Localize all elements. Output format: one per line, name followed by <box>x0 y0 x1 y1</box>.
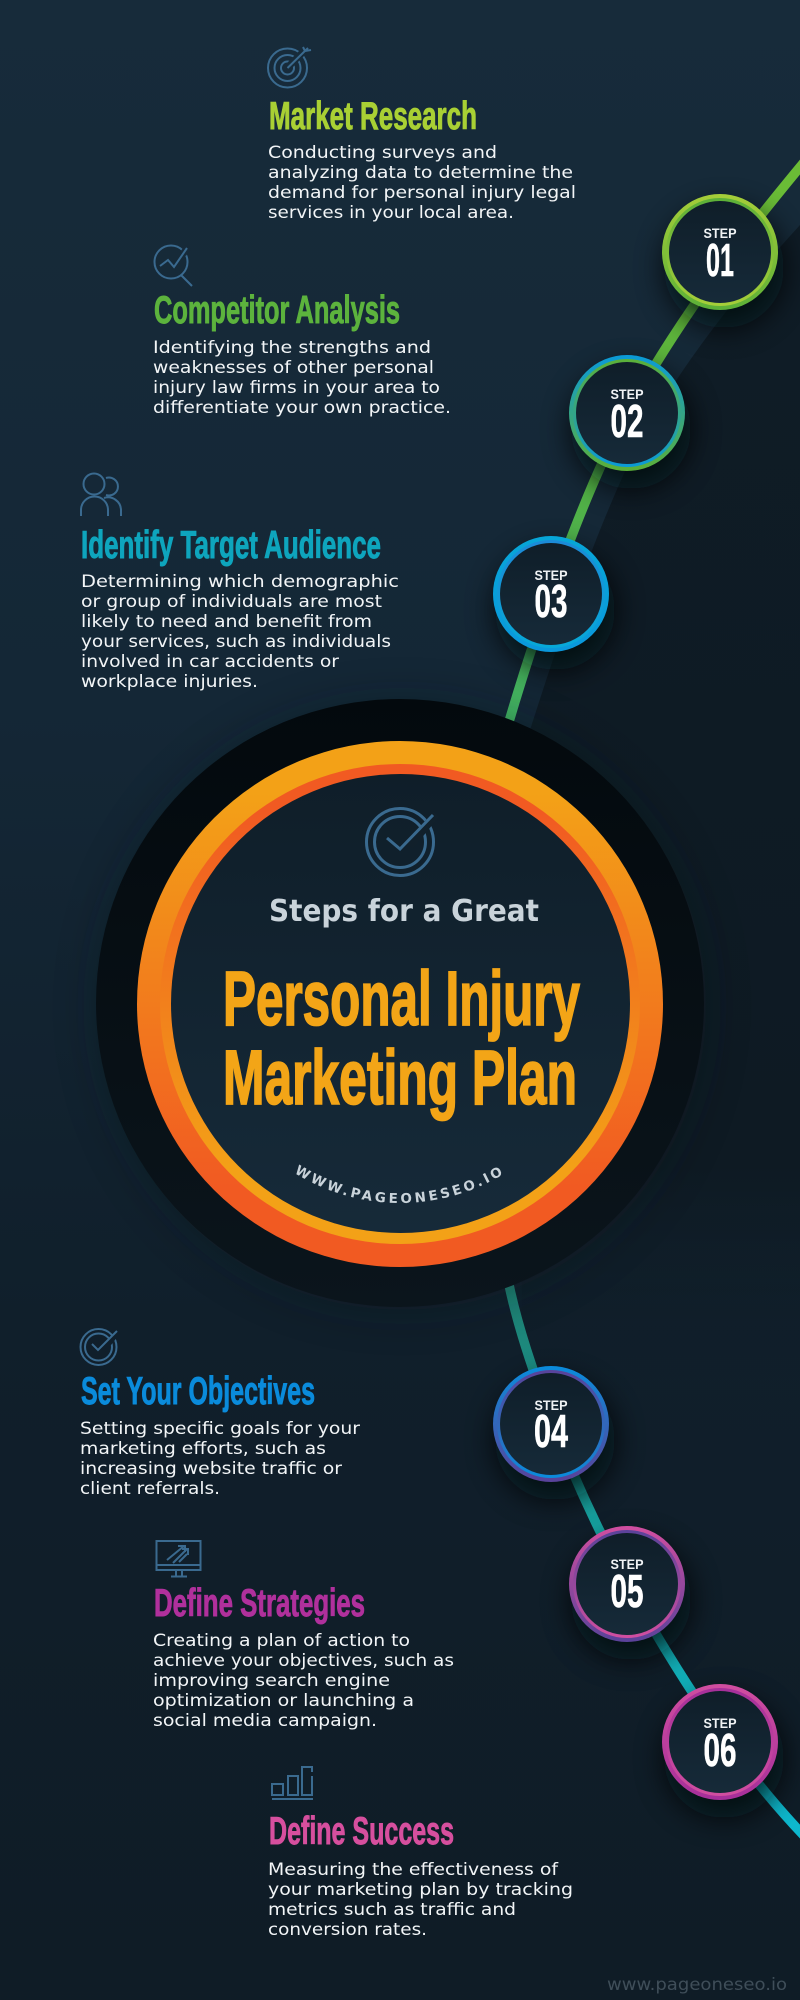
icon: magnifier chart <box>154 246 192 286</box>
subtitle: Steps for a Great <box>269 894 539 929</box>
body text: Determining which demographic <box>81 572 399 592</box>
step 05: STEP <box>610 1556 644 1572</box>
icon: monitor arrows <box>156 1541 200 1576</box>
body text <box>153 1631 454 1731</box>
title: Marketing Plan <box>223 1035 577 1121</box>
body text: improving search engine <box>153 1671 390 1691</box>
icon: bar chart <box>272 1767 313 1799</box>
step 05: 05 <box>610 1565 644 1617</box>
body text: weaknesses of other personal <box>153 358 434 378</box>
heading: Competitor Analysis <box>154 289 400 332</box>
step 03 <box>493 536 615 670</box>
body text: demand for personal injury legal <box>268 183 576 203</box>
step 01: STEP <box>704 225 736 241</box>
heading: Define Strategies <box>154 1582 365 1625</box>
heading: Set Your Objectives <box>81 1370 315 1413</box>
badge core <box>171 774 630 1233</box>
body text: achieve your objectives, such as <box>153 1651 454 1671</box>
body text: Identifying the strengths and <box>153 338 431 358</box>
footer url: www.pageoneseo.io <box>607 1975 787 1995</box>
body text: your services, such as individuals <box>81 632 391 652</box>
badge inner ring <box>160 764 640 1244</box>
body text <box>80 1419 360 1499</box>
body text: social media campaign. <box>153 1711 377 1731</box>
path: upper line <box>508 155 800 725</box>
step 02: STEP <box>610 386 644 402</box>
body text: optimization or launching a <box>153 1691 414 1711</box>
step 06: 06 <box>704 1724 736 1776</box>
title: Personal Injury <box>223 956 580 1042</box>
step 04: STEP <box>534 1397 568 1413</box>
body text <box>268 143 576 223</box>
body text: increasing website traffic or <box>80 1459 342 1479</box>
body text <box>268 1860 573 1940</box>
body text: involved in car accidents or <box>81 652 339 672</box>
body text: Setting specific goals for your <box>80 1419 360 1439</box>
body text: analyzing data to determine the <box>268 163 573 183</box>
title <box>223 956 580 1121</box>
icon: check target small <box>80 1329 118 1365</box>
heading: Define Success <box>269 1810 454 1853</box>
body text: marketing efforts, such as <box>80 1439 326 1459</box>
step 04: 04 <box>534 1405 568 1457</box>
panel: competitor analysis <box>153 246 451 418</box>
body text: differentiate your own practice. <box>153 398 451 418</box>
body text: Creating a plan of action to <box>153 1631 410 1651</box>
body text <box>153 338 451 418</box>
dark region right of path <box>520 225 800 1400</box>
curved website text: WWW.PAGEONESEO.IO <box>296 1164 502 1204</box>
step 06 <box>662 1684 784 1818</box>
step 02: 02 <box>610 395 644 447</box>
panel: set your objectives <box>80 1329 360 1499</box>
badge black disc <box>96 699 704 1307</box>
body text: workplace injuries. <box>81 672 258 692</box>
icon: check target <box>366 808 436 876</box>
step 03: STEP <box>534 567 568 583</box>
body text: Conducting surveys and <box>268 143 497 163</box>
path: lower line <box>508 1280 800 1842</box>
icon: target <box>268 47 311 88</box>
step 02 <box>569 355 691 489</box>
icon: people <box>81 474 121 516</box>
step 05 <box>569 1526 691 1660</box>
step 01: 01 <box>706 234 734 286</box>
body text: likely to need and benefit from <box>81 612 372 632</box>
body text: or group of individuals are most <box>81 592 382 612</box>
step 03: 03 <box>534 575 568 627</box>
step 06: STEP <box>704 1715 736 1731</box>
body text: services in your local area. <box>268 203 514 223</box>
panel: define strategies <box>153 1541 454 1731</box>
body text: your marketing plan by tracking <box>268 1880 573 1900</box>
step 04 <box>493 1366 615 1500</box>
step 01 <box>662 194 784 328</box>
badge outer ring <box>137 741 663 1267</box>
body text: Measuring the effectiveness of <box>268 1860 559 1880</box>
panel: central badge <box>96 696 704 1312</box>
heading: Identify Target Audience <box>81 524 381 567</box>
heading: Market Research <box>269 95 477 138</box>
panel: identify target audience <box>81 474 399 692</box>
body text: injury law firms in your area to <box>153 378 440 398</box>
panel: define success <box>268 1767 573 1940</box>
body text: conversion rates. <box>268 1920 427 1940</box>
panel: market research <box>268 47 576 223</box>
body text <box>81 572 399 692</box>
body text: metrics such as traffic and <box>268 1900 516 1920</box>
body text: client referrals. <box>80 1479 220 1499</box>
